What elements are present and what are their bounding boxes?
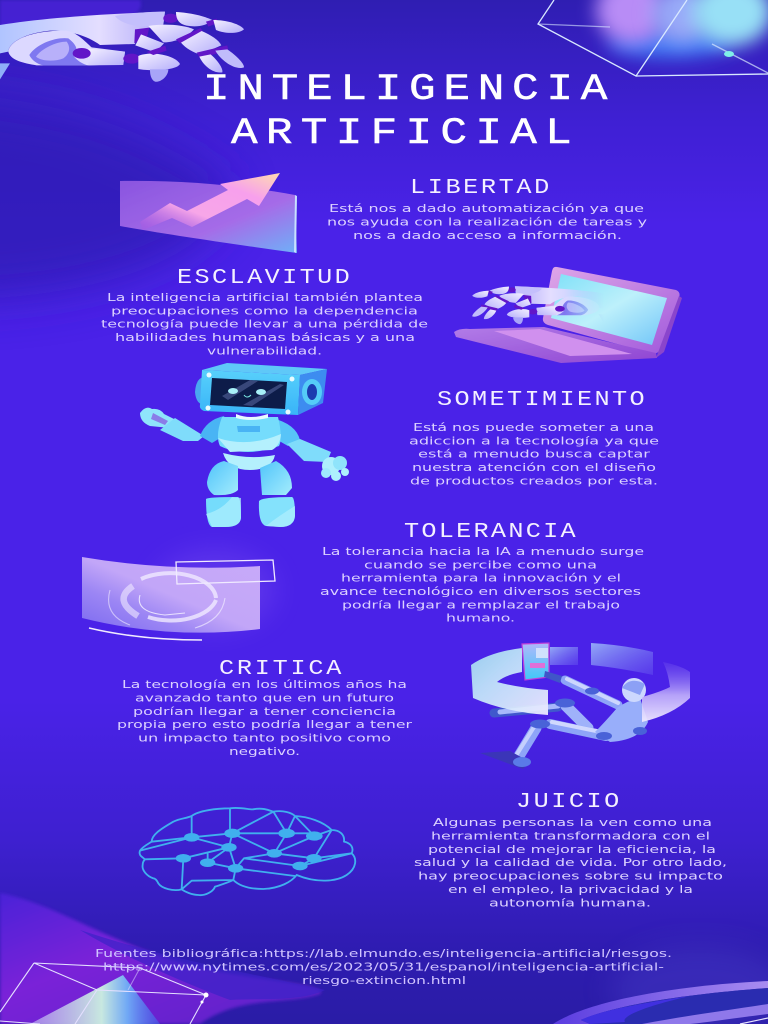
icon: glass cube top right [538, 0, 768, 76]
text: esclavitud: habilidades humanas básicas y a una [115, 331, 415, 344]
icon: blue robot [140, 363, 349, 527]
icon: robot hand top left [0, 12, 244, 82]
text: juicio: hay preocupaciones sobre su impacto [418, 870, 723, 883]
icon: robot with holographic ring [471, 643, 690, 769]
text: juicio [414, 816, 727, 909]
title: INTELIGENCIA [203, 69, 608, 111]
text: tolerancia: avance tecnológico en diversos sectores [320, 585, 641, 598]
text: libertad [327, 202, 648, 242]
text: esclavitud [101, 291, 428, 357]
title [203, 69, 608, 155]
heading: critica: CRITICA [219, 657, 341, 680]
icon: growth chart [120, 173, 297, 253]
text: sometimiento [409, 421, 659, 487]
text: tolerancia [320, 545, 644, 625]
heading: juicio: JUICIO [516, 790, 619, 813]
icon: purple ring bottom right [553, 981, 768, 1024]
text: juicio: potencial de mejorar la eficiencia, la [428, 843, 716, 856]
icon: laptop with robot hand [454, 267, 682, 363]
text: sometimiento: adiccion a la tecnología ya que [409, 434, 659, 447]
text: tolerancia: cuando se percibe como una [364, 558, 597, 571]
text: critica: negativo. [229, 745, 300, 758]
icon: neural brain [140, 808, 355, 895]
text: esclavitud: tecnología puede llevar a una pérdida de [101, 318, 428, 331]
text: esclavitud: preocupaciones como la dependencia [111, 304, 418, 317]
text: tolerancia: La tolerancia hacia la IA a menudo surge [322, 545, 644, 558]
text: sometimiento: Está nos puede someter a una [413, 421, 654, 434]
icon: holographic panel [82, 550, 275, 640]
text: libertad: nos a dado acceso a información. [353, 229, 622, 242]
text: tolerancia: herramienta para la innovación y el [341, 572, 621, 585]
text: juicio: autonomía humana. [489, 896, 651, 909]
text: sometimiento: está a menudo busca captar [418, 448, 651, 461]
text: esclavitud: La inteligencia artificial también plantea [107, 291, 423, 304]
text: tolerancia: humano. [446, 612, 515, 625]
text: juicio: Algunas personas la ven como una [433, 816, 712, 829]
text: critica: La tecnología en los últimos años ha [122, 678, 407, 691]
text: critica: un impacto tanto positivo como [138, 732, 391, 745]
text: juicio: salud y la calidad de vida. Por otro lado, [414, 856, 727, 869]
heading: esclavitud: ESCLAVITUD [177, 266, 350, 289]
text: critica: propia pero esto podría llegar a tener [117, 718, 413, 731]
heading: tolerancia: TOLERANCIA [404, 520, 576, 543]
text: sources [95, 947, 672, 987]
heading: sometimiento: SOMETIMIENTO [437, 388, 645, 411]
text: sources: https://www.nytimes.com/es/2023/05/31/espanol/inteligencia-artificial- [103, 960, 664, 973]
text: critica: podrían llegar a tener conciencia [133, 705, 396, 718]
heading: libertad: LIBERTAD [410, 176, 549, 199]
text: critica: avanzado tanto que en un futuro [135, 691, 394, 704]
title: ARTIFICIAL [231, 113, 572, 155]
text: sources: Fuentes bibliográfica:https://lab.elmundo.es/inteligencia-artificial/riesgos. [95, 947, 672, 960]
text: libertad: nos ayuda con la realización de tareas y [327, 216, 648, 228]
text: critica [117, 678, 413, 758]
text: sometimiento: nuestra atención con el diseño [412, 461, 656, 474]
text: libertad: Está nos a dado automatización ya que [329, 202, 644, 215]
text: esclavitud: vulnerabilidad. [207, 344, 322, 357]
text: juicio: en el empleo, la privacidad y la [448, 883, 693, 896]
text: sometimiento: de productos creados por esta. [410, 474, 658, 487]
icon: glass cube bottom left [0, 963, 208, 1024]
text: juicio: herramienta transformadora con el [431, 829, 710, 842]
text: tolerancia: podría llegar a remplazar el trabajo [342, 598, 620, 611]
text: sources: riesgo-extincion.html [302, 974, 466, 987]
